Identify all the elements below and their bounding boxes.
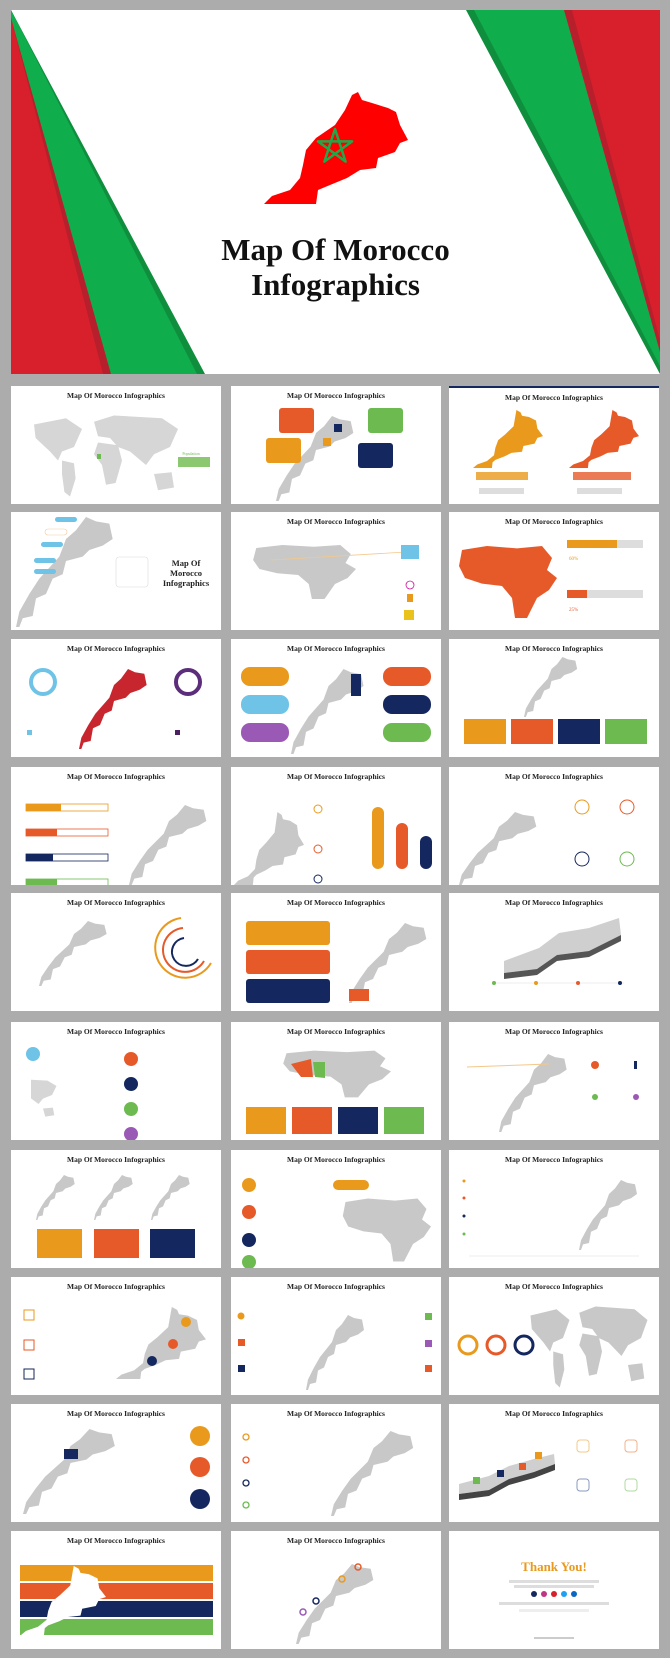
slide 26: pins (231, 1404, 441, 1522)
slide 29: city pins: Map Of Morocco Infographics (287, 1536, 385, 1545)
slide 6: africa orange with bars (449, 512, 659, 630)
slide 6: africa orange with bars: 60% (569, 557, 578, 562)
slide 12: outline icons (449, 767, 659, 885)
slide 10: progress bars (11, 767, 221, 885)
decorative left flag stripes (11, 10, 205, 374)
slide 3: two maps with people: Map Of Morocco Infographics (505, 393, 603, 402)
slide 21: timeline dots (449, 1150, 659, 1268)
slide 1: world map: Population (182, 451, 200, 456)
slide 3: two maps with people (449, 386, 659, 504)
slide 27: 3d map icons: Map Of Morocco Infographics (505, 1409, 603, 1418)
slide 11: bar chart: Map Of Morocco Infographics (287, 772, 385, 781)
slide 11: bar chart (231, 767, 441, 885)
slide 16: seasons (11, 1022, 221, 1140)
slide 8: rounded region labels: Map Of Morocco Infographics (287, 644, 385, 653)
slide 4: cities labels (11, 512, 221, 630)
slide 20: icons with africa (231, 1150, 441, 1268)
slide 7: donuts with red map (11, 639, 221, 757)
slide 29: city pins (231, 1531, 441, 1649)
slide 6: africa orange with bars: 25% (569, 608, 578, 613)
slide 21: timeline dots: Map Of Morocco Infographics (505, 1155, 603, 1164)
slide 18: rabat: Map Of Morocco Infographics (505, 1027, 603, 1036)
slide 9: four boxes with connectors (449, 639, 659, 757)
hero title (221, 232, 450, 302)
slide 18: rabat (449, 1022, 659, 1140)
slide 16: seasons: Map Of Morocco Infographics (67, 1027, 165, 1036)
slide 6: africa orange with bars: Map Of Morocco Infographics (505, 517, 603, 526)
slide 1: world map: Map Of Morocco Infographics (67, 391, 165, 400)
slide 25: region icons circles (11, 1404, 221, 1522)
slide 19: three maps callouts: Map Of Morocco Infographics (67, 1155, 165, 1164)
decorative right flag stripes (466, 10, 660, 374)
slide 17: north africa countries (231, 1022, 441, 1140)
slide 1: world map (11, 386, 221, 504)
hero title: Infographics (251, 267, 420, 302)
slide 28: colored bands: Map Of Morocco Infographics (67, 1536, 165, 1545)
slide 4: cities labels: Infographics (163, 578, 209, 588)
slide 14: stacked cards (231, 893, 441, 1011)
slide 30: thank you (449, 1531, 659, 1649)
morocco map with star (264, 92, 408, 204)
slide 5: north africa map flag: Map Of Morocco Infographics (287, 517, 385, 526)
slide 7: donuts with red map: Map Of Morocco Infographics (67, 644, 165, 653)
slide 27: 3d map icons (449, 1404, 659, 1522)
slide 5: north africa map flag (231, 512, 441, 630)
hero title: Map Of Morocco (221, 232, 450, 267)
slide 10: progress bars: Map Of Morocco Infographics (67, 772, 165, 781)
slide 23: six features (231, 1277, 441, 1395)
slide 15: 3d map timeline (449, 893, 659, 1011)
slide 4: cities labels: Map Of (172, 558, 200, 568)
slide 26: pins: Map Of Morocco Infographics (287, 1409, 385, 1418)
slide 19: three maps callouts (11, 1150, 221, 1268)
slide 22: dots on map (11, 1277, 221, 1395)
slide 20: icons with africa: Map Of Morocco Infographics (287, 1155, 385, 1164)
slide 15: 3d map timeline: Map Of Morocco Infographics (505, 898, 603, 907)
hero slide (11, 10, 660, 374)
slide 30: thank you: Thank You! (521, 1559, 587, 1574)
slide 13: arcs (11, 893, 221, 1011)
slide 23: six features: Map Of Morocco Infographics (287, 1282, 385, 1291)
slide 22: dots on map: Map Of Morocco Infographics (67, 1282, 165, 1291)
slide 24: world donuts: Map Of Morocco Infographics (505, 1282, 603, 1291)
slide 9: four boxes with connectors: Map Of Morocco Infographics (505, 644, 603, 653)
slide 24: world donuts (449, 1277, 659, 1395)
slide 12: outline icons: Map Of Morocco Infographics (505, 772, 603, 781)
slide 28: colored bands (11, 1531, 221, 1649)
slide 14: stacked cards: Map Of Morocco Infographics (287, 898, 385, 907)
slide 4: cities labels: Morocco (170, 568, 202, 578)
slide 2: regions callouts: Map Of Morocco Infographics (287, 391, 385, 400)
slide 17: north africa countries: Map Of Morocco Infographics (287, 1027, 385, 1036)
slide 25: region icons circles: Map Of Morocco Infographics (67, 1409, 165, 1418)
slide 2: regions callouts (231, 386, 441, 504)
slide 13: arcs: Map Of Morocco Infographics (67, 898, 165, 907)
slide 8: rounded region labels (231, 639, 441, 757)
